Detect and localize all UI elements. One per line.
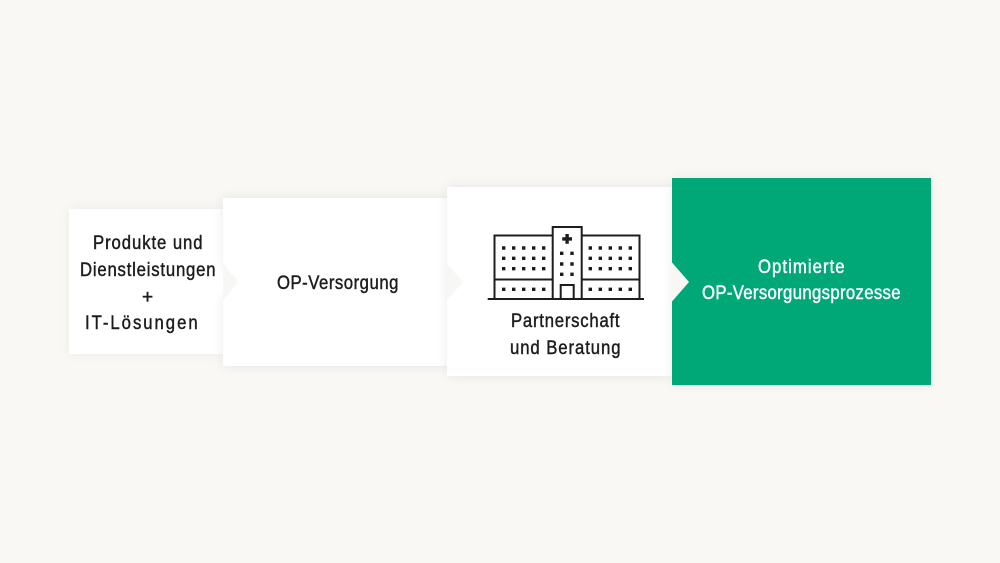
panel: Partnerschaft und Beratung: Partnerschaft xyxy=(511,310,620,331)
panel: Produkte und Dienstleistungen + IT-Lösungen: Dienstleistungen xyxy=(80,259,216,280)
panel: Optimierte OP-Versorgungsprozesse: Optimierte xyxy=(758,256,845,277)
panel: Produkte und Dienstleistungen + IT-Lösungen xyxy=(69,209,223,354)
panel: OP-Versorgung xyxy=(223,198,447,366)
icon: hospital building xyxy=(488,227,644,299)
panel: Produkte und Dienstleistungen + IT-Lösungen: + xyxy=(142,287,153,308)
panel: Produkte und Dienstleistungen + IT-Lösungen: IT-Lösungen xyxy=(85,312,198,333)
panel: Produkte und Dienstleistungen + IT-Lösungen: Produkte und xyxy=(93,232,203,253)
panel: OP-Versorgung: OP-Versorgung xyxy=(277,272,398,293)
panel: Partnerschaft und Beratung: und Beratung xyxy=(510,337,621,358)
panel: Partnerschaft und Beratung xyxy=(447,187,672,376)
panel: Optimierte OP-Versorgungsprozesse: OP-Versorgungsprozesse xyxy=(702,282,901,303)
panel: Optimierte OP-Versorgungsprozesse xyxy=(672,178,931,385)
